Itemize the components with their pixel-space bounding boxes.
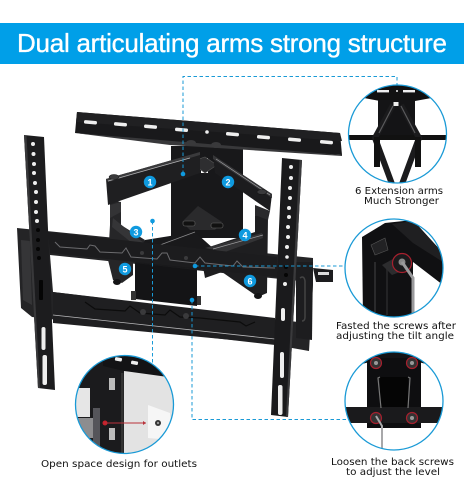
upper arm right	[213, 155, 272, 220]
detail circle: tilt screw	[345, 219, 443, 320]
right vertical rail	[271, 158, 302, 417]
numbered badges: 5	[122, 264, 128, 274]
numbered badges: 1	[147, 177, 153, 187]
numbered badges: 3	[133, 227, 139, 237]
label: extension arms: Much Stronger	[364, 196, 440, 207]
numbered badges: 2	[225, 177, 231, 187]
dashed callout lines	[152, 76, 397, 420]
label: level screws: to adjust the level	[346, 467, 440, 478]
back plate	[17, 228, 333, 351]
lower arms and central plate	[108, 200, 268, 306]
label: tilt screw	[336, 321, 457, 342]
detail circle: level screws	[345, 352, 443, 450]
title banner: Dual articulating arms strong structure	[17, 28, 447, 58]
detail circle: outlet space	[75, 355, 175, 455]
label: extension arms	[355, 186, 443, 207]
label: tilt screw: adjusting the tilt angle	[336, 331, 454, 342]
label: level screws: Loosen the back screws	[331, 457, 454, 468]
lower cross rail	[53, 292, 275, 344]
label: level screws	[331, 457, 454, 478]
title banner	[0, 23, 464, 64]
numbered badges	[119, 176, 256, 287]
label: outlet space: Open space design for outlets	[41, 459, 197, 470]
numbered badges: 6	[247, 276, 253, 286]
left vertical rail	[24, 135, 55, 390]
wall mount product illustration	[17, 112, 342, 417]
callout anchor dots	[150, 172, 197, 302]
label: tilt screw: Fasted the screws after	[336, 321, 457, 332]
central column	[171, 146, 243, 238]
upper cross rail	[48, 232, 277, 277]
label: extension arms: 6 Extension arms	[355, 186, 443, 197]
upper arm left	[106, 152, 200, 218]
numbered badges: 4	[242, 230, 248, 240]
top wall bracket	[75, 112, 342, 156]
detail circle: extension arms	[348, 85, 448, 184]
